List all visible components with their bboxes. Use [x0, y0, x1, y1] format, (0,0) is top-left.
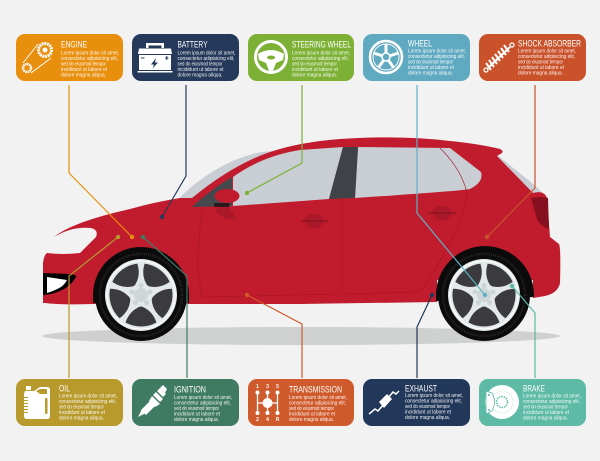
car window: front — [233, 147, 343, 206]
car glass strip: windshield top — [178, 151, 272, 199]
text: wheel description: incididunt ut labore et — [408, 65, 455, 71]
text: brake description: sed do eiusmod tempor — [523, 404, 568, 410]
text: wheel description: consectetur adipisicing elit, — [408, 54, 465, 60]
text: wheel description: dolore magna aliqua. — [408, 70, 453, 76]
icon: gear shift pattern: 5 — [276, 384, 279, 390]
car body — [43, 137, 560, 304]
text: oil description — [59, 394, 117, 422]
text: ignition description: incididunt ut labore et — [174, 412, 221, 418]
text: engine description: dolore magna aliqua. — [61, 72, 106, 78]
text: exhaust description: incididunt ut labore et — [405, 410, 452, 416]
text: transmission description: Lorem ipsum dolor sit amet, — [289, 395, 347, 401]
mirror — [214, 189, 240, 219]
headlight — [43, 273, 76, 295]
text: ignition description: consectetur adipisicing elit, — [174, 400, 231, 406]
panel: brake — [479, 379, 586, 426]
text: shock absorber description: sed do eiusmod tempor — [518, 60, 563, 66]
text: steering wheel description: sed do eiusmod tempor — [292, 62, 337, 68]
icon: spark plug — [138, 385, 167, 417]
panel: oil — [16, 379, 123, 426]
panel: shock absorber — [479, 34, 586, 81]
text: steering wheel description — [292, 50, 350, 78]
heading: oil: OIL — [59, 384, 70, 394]
text: ignition description: dolore magna aliqua. — [174, 417, 219, 423]
rear wheel — [438, 249, 530, 341]
text: exhaust description: sed do eiusmod tempor — [405, 404, 450, 410]
icon: shock absorber — [484, 43, 514, 72]
icon: gear shift pattern: R — [276, 417, 280, 423]
text: engine description: consectetur adipisicing elit, — [61, 56, 118, 62]
text: shock absorber description — [518, 48, 576, 76]
icon: timing belt — [23, 44, 52, 73]
door lines — [198, 148, 467, 297]
car glass strip: rear window — [496, 154, 545, 195]
connector: ignition — [141, 235, 187, 378]
car — [43, 137, 560, 341]
door handle: rear — [428, 206, 456, 220]
connector: steering wheel — [245, 85, 302, 195]
connector: engine — [69, 85, 134, 239]
text: brake description: consectetur adipisicing elit, — [523, 399, 580, 405]
icon: gear shift pattern: 4 — [266, 417, 269, 423]
text: battery description: dolore magna aliqua. — [178, 72, 222, 78]
text: battery description: consectetur adipisicing elit, — [178, 56, 234, 62]
text: engine description: Lorem ipsum dolor sit amet, — [61, 50, 119, 56]
heading: wheel: WHEEL — [408, 38, 432, 48]
text: engine description — [61, 50, 119, 78]
text: transmission description: incididunt ut labore et — [289, 412, 336, 418]
connector: brake — [510, 284, 535, 378]
icon: battery — [138, 43, 172, 72]
panel: steering wheel — [248, 34, 354, 81]
panel: ignition — [132, 379, 239, 426]
heading: battery: BATTERY — [178, 40, 208, 50]
text: brake description — [523, 394, 581, 422]
text: oil description: Lorem ipsum dolor sit amet, — [59, 394, 117, 400]
text: shock absorber description: consectetur adipisicing elit, — [518, 54, 575, 60]
text: oil description: incididunt ut labore et — [59, 410, 106, 416]
connector: oil — [69, 235, 120, 378]
text: engine description: incididunt ut labore et — [61, 67, 108, 73]
heading: ignition: IGNITION — [174, 384, 206, 394]
text: steering wheel description: consectetur adipisicing elit, — [292, 56, 349, 62]
icon: exhaust muffler — [369, 391, 399, 414]
heading: brake: BRAKE — [523, 384, 545, 394]
door handle: front — [301, 214, 328, 228]
text: engine description: sed do eiusmod tempor — [61, 62, 106, 68]
text: wheel description — [408, 48, 466, 76]
text: exhaust description — [405, 393, 463, 421]
text: wheel description: Lorem ipsum dolor sit amet, — [408, 48, 466, 54]
text: oil description: sed do eiusmod tempor — [59, 404, 104, 410]
heading: engine: ENGINE — [61, 40, 87, 50]
connector: wheel — [417, 85, 487, 297]
connector: transmission — [245, 293, 302, 378]
text: transmission description — [289, 395, 347, 423]
text: battery description: sed do eiusmod tempor — [178, 62, 223, 68]
text: exhaust description: Lorem ipsum dolor sit amet, — [405, 393, 463, 399]
car quarter window — [192, 177, 232, 207]
text: battery description: Lorem ipsum dolor sit amet, — [178, 50, 236, 56]
connector: exhaust — [417, 293, 434, 378]
heading: steering wheel: STEERING WHEEL — [292, 40, 351, 50]
text: shock absorber description: dolore magna aliqua. — [518, 70, 563, 76]
panel: transmission — [248, 379, 354, 426]
text: brake description: Lorem ipsum dolor sit amet, — [523, 394, 581, 400]
text: brake description: dolore magna aliqua. — [523, 416, 568, 422]
text: transmission description: sed do eiusmod tempor — [289, 406, 334, 412]
text: ignition description: Lorem ipsum dolor sit amet, — [174, 395, 232, 401]
text: transmission description: consectetur adipisicing elit, — [289, 400, 346, 406]
icon: gear shift pattern: 3 — [266, 384, 269, 390]
tail light — [531, 197, 549, 229]
car pillar — [329, 147, 358, 199]
text: oil description: dolore magna aliqua. — [59, 416, 104, 422]
text: shock absorber description: Lorem ipsum dolor sit amet, — [518, 48, 576, 54]
text: steering wheel description: dolore magna aliqua. — [292, 72, 337, 78]
text: brake description: incididunt ut labore et — [523, 410, 570, 416]
connector: shock absorber — [485, 85, 535, 239]
text: steering wheel description: Lorem ipsum dolor sit amet, — [292, 50, 350, 56]
icon: wheel — [370, 41, 402, 73]
panel: engine — [16, 34, 123, 81]
icon: steering wheel — [256, 42, 286, 72]
text: ignition description: sed do eiusmod tempor — [174, 406, 219, 412]
text: exhaust description: dolore magna aliqua. — [405, 415, 450, 421]
text: wheel description: sed do eiusmod tempor — [408, 60, 453, 66]
car window: rear — [355, 147, 482, 198]
icon: brake disc — [485, 385, 519, 419]
text: steering wheel description: incididunt ut labore et — [292, 67, 339, 73]
car shadow — [42, 327, 560, 345]
connector: battery — [160, 85, 186, 219]
icon: gear shift pattern: 1 — [256, 384, 259, 390]
icon: oil canister — [24, 386, 50, 419]
text: battery description: incididunt ut labore et — [178, 67, 224, 73]
heading: transmission: TRANSMISSION — [289, 384, 342, 394]
front wheel — [95, 249, 187, 341]
text: battery description — [178, 50, 236, 78]
icon: gear shift pattern — [256, 384, 280, 423]
text: exhaust description: consectetur adipisicing elit, — [405, 398, 462, 404]
text: shock absorber description: incididunt ut labore et — [518, 65, 565, 71]
heading: exhaust: EXHAUST — [405, 384, 437, 394]
panel: exhaust — [363, 379, 470, 426]
panel: wheel — [363, 34, 470, 81]
text: transmission description: dolore magna aliqua. — [289, 417, 334, 423]
wheel arches — [93, 246, 534, 303]
text: ignition description — [174, 395, 232, 423]
text: oil description: consectetur adipisicing elit, — [59, 399, 116, 405]
icon: gear shift pattern: 2 — [256, 417, 259, 423]
panel: battery — [132, 34, 239, 81]
